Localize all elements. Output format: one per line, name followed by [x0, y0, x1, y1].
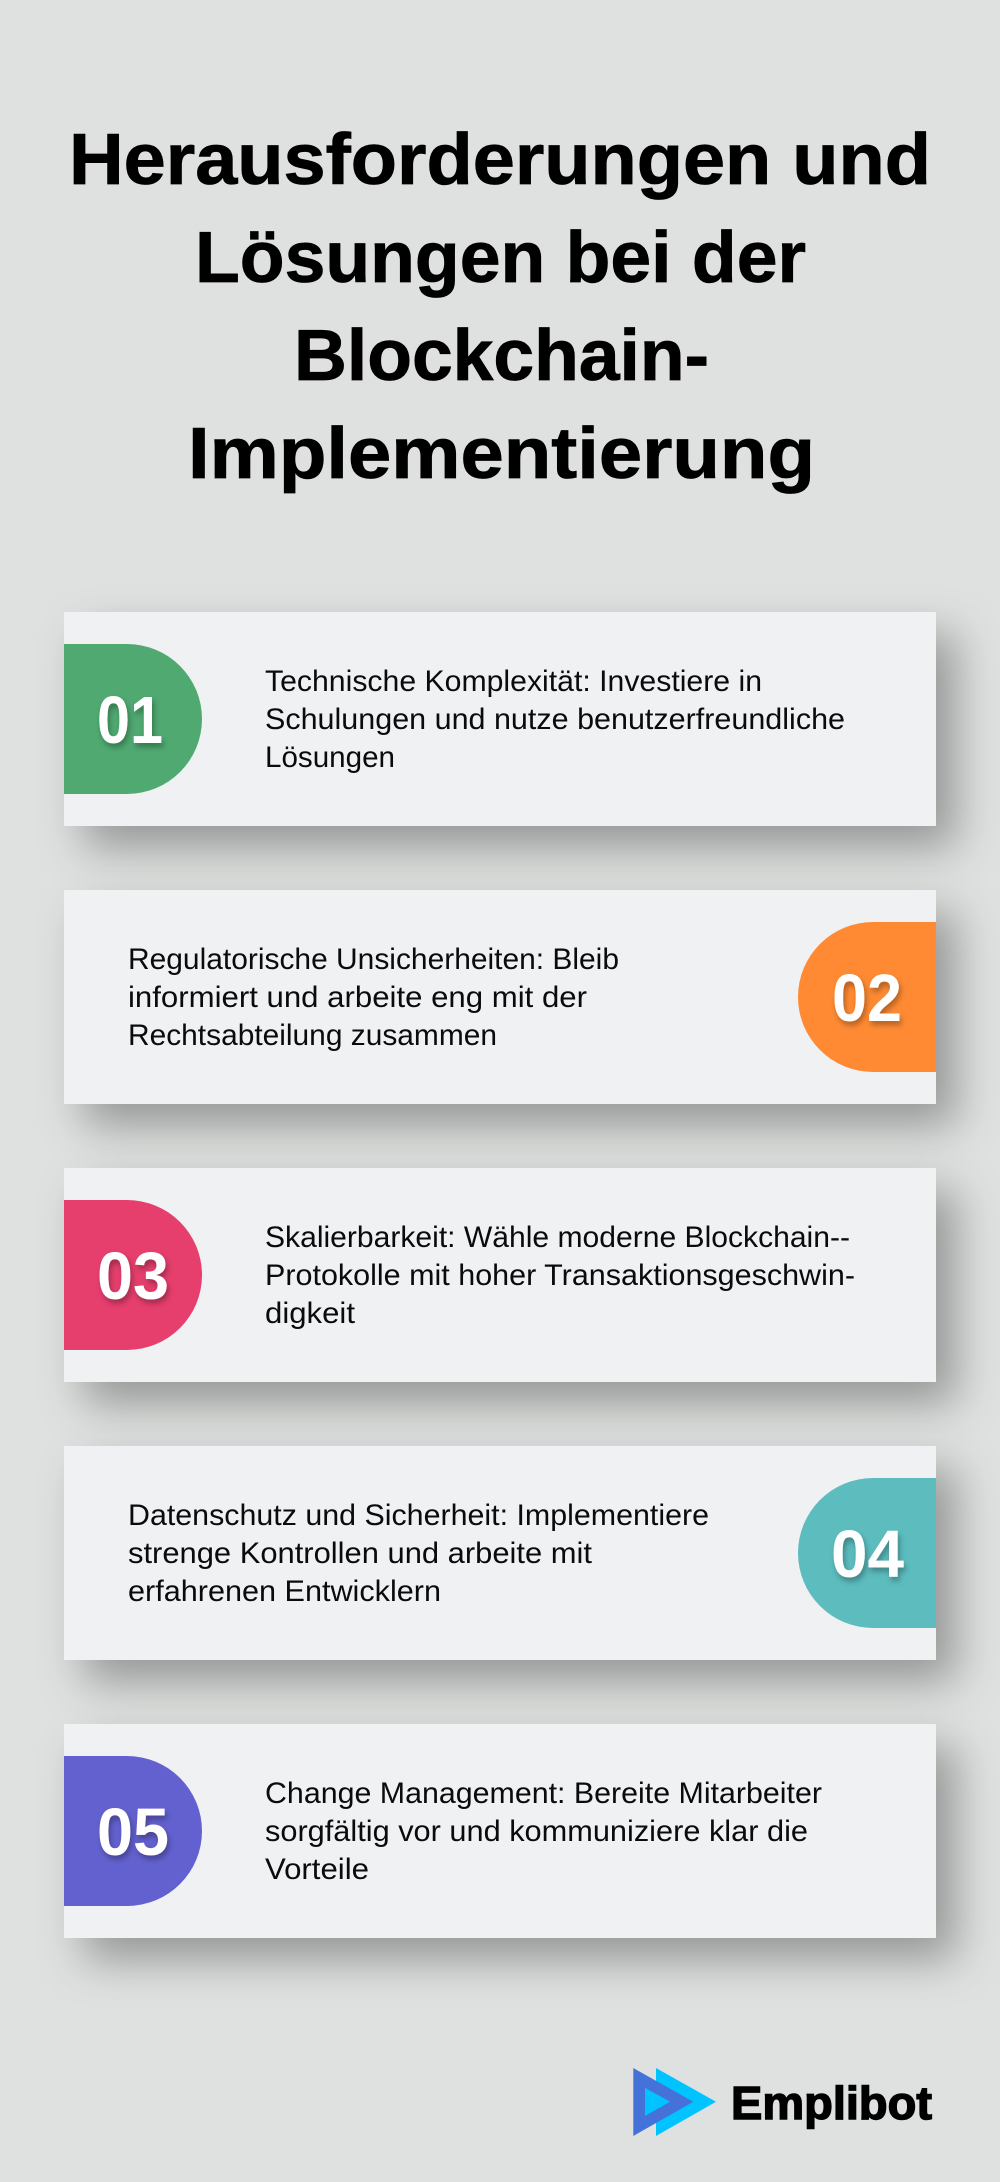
text: step 02 — [128, 943, 619, 1052]
title: Lösungen bei der — [195, 218, 806, 298]
text: step 01: Schulungen und nutze benutzerfreundliche — [265, 703, 845, 736]
badge 05: 05 — [97, 1795, 169, 1870]
icon: play triangles — [633, 2068, 716, 2136]
text: step 04: erfahrenen Entwicklern — [128, 1575, 441, 1608]
logo: Emplibot — [633, 2068, 932, 2136]
badge 03 — [64, 1200, 202, 1350]
text: step 01: Technische Komplexität: Investiere in — [265, 665, 762, 698]
text: step 01: Lösungen — [265, 741, 395, 774]
text: step 02: Rechtsabteilung zusammen — [128, 1019, 497, 1052]
text: step 04: Datenschutz und Sicherheit: Implementiere — [128, 1499, 709, 1532]
panel: step 04 — [64, 1446, 936, 1660]
text: step 05: sorgfältig vor und kommuniziere klar die — [265, 1815, 808, 1848]
text: step 02: Regulatorische Unsicherheiten: Bleib — [128, 943, 619, 976]
text: step 05: Vorteile — [265, 1853, 369, 1886]
badge 04 — [798, 1478, 936, 1628]
badge 05 — [64, 1756, 202, 1906]
badge 04: 04 — [831, 1517, 904, 1592]
panel: step 02 — [64, 890, 936, 1104]
text: step 03: Skalierbarkeit: Wähle moderne Blockchain-- — [265, 1221, 850, 1254]
badge 01 — [64, 644, 202, 794]
text: step 05: Change Management: Bereite Mitarbeiter — [265, 1777, 822, 1810]
text: step 02: informiert und arbeite eng mit der — [128, 981, 587, 1014]
badge 01: 01 — [97, 683, 163, 758]
title — [69, 120, 931, 494]
text: step 03 — [265, 1221, 855, 1330]
text: step 01 — [265, 665, 845, 774]
text: step 04 — [128, 1499, 709, 1608]
logo wordmark: Emplibot — [731, 2077, 932, 2129]
panel: step 01 — [64, 612, 936, 826]
text: step 03: Protokolle mit hoher Transaktionsgeschwin- — [265, 1259, 855, 1292]
text: step 05 — [265, 1777, 822, 1886]
badge 02: 02 — [832, 961, 902, 1036]
panel: step 05 — [64, 1724, 936, 1938]
text: step 03: digkeit — [265, 1297, 355, 1330]
text: step 04: strenge Kontrollen und arbeite mit — [128, 1537, 592, 1570]
panel: step 03 — [64, 1168, 936, 1382]
badge 02 — [798, 922, 936, 1072]
title: Herausforderungen und — [69, 120, 931, 200]
badge 03: 03 — [97, 1239, 169, 1314]
title: Blockchain- — [294, 316, 709, 396]
title: Implementierung — [188, 414, 815, 494]
